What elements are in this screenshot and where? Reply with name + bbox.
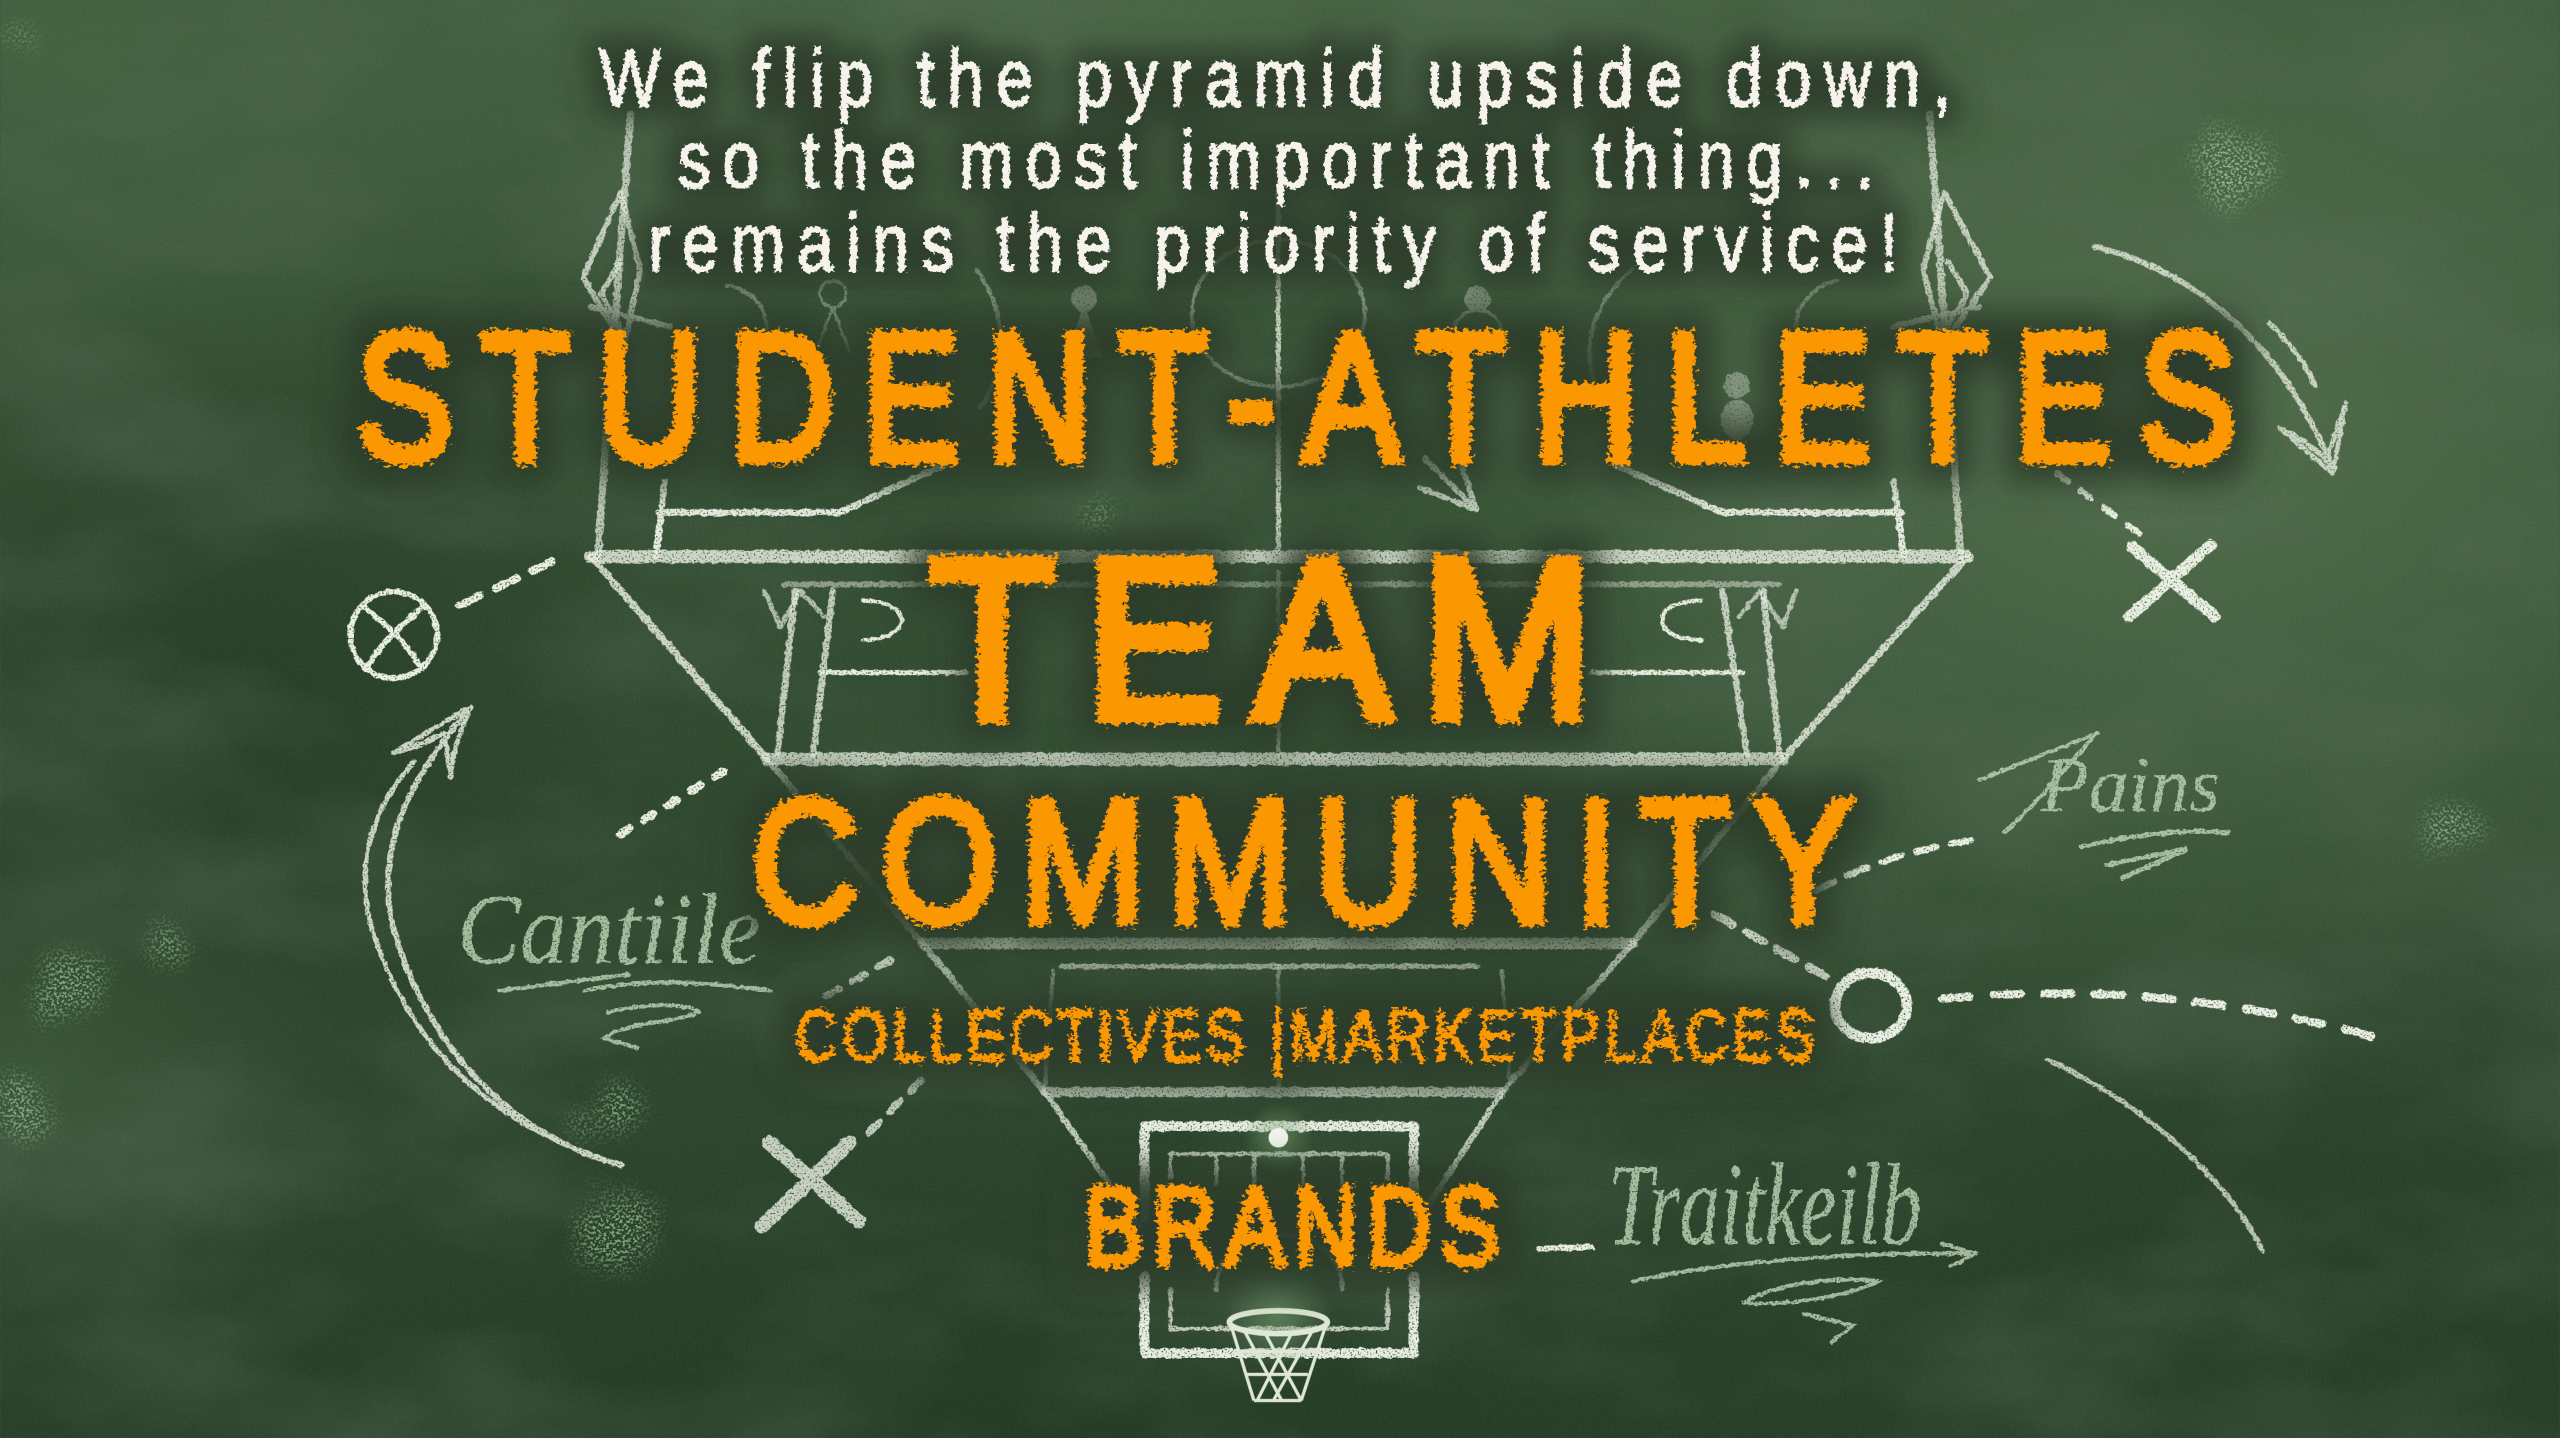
play markers and arrows bbox=[350, 246, 2378, 1250]
dashed line into right circle bbox=[1714, 914, 1825, 976]
right lower arc bbox=[2047, 1059, 2263, 1250]
right curved arrow bbox=[2094, 246, 2346, 473]
right backboard diamond bbox=[1894, 193, 1990, 346]
chalk signature: right bbox=[1979, 733, 2228, 878]
dashed line to bottom left X bbox=[826, 960, 924, 1133]
dotted line to second tier bbox=[621, 762, 738, 834]
third tier court bbox=[767, 759, 1783, 1090]
heading: collectives and marketplaces: COLLECTIVES |MARKETPLACES bbox=[795, 996, 1815, 1078]
icon: bottom left X marker bbox=[763, 1143, 859, 1226]
icon: left circled X player bbox=[350, 592, 437, 678]
dashed line leaving right circle bbox=[1943, 993, 2378, 1038]
line two: so the most important thing... bbox=[678, 114, 1874, 205]
line three: remains the priority of service! bbox=[648, 197, 1898, 289]
dashed line to top right X bbox=[2057, 473, 2142, 535]
chalk signature: bottom right bbox=[1608, 1140, 1975, 1342]
ghost player figures bbox=[816, 281, 1752, 437]
intro statement bbox=[599, 32, 1951, 289]
chalk signature: bottom right: Traitkeilb bbox=[1608, 1140, 1921, 1270]
heading: team: TEAM bbox=[929, 512, 1593, 768]
dashed curve to top right signature bbox=[1815, 841, 1970, 891]
chalk signature: left bbox=[457, 873, 771, 1048]
left backboard diamond bbox=[583, 193, 670, 346]
chalk signature: left: Cantiile bbox=[457, 873, 761, 985]
glowing dot at the bottom court bbox=[1242, 1102, 1314, 1174]
icon: top right X marker bbox=[2129, 545, 2215, 617]
top tier court bbox=[591, 114, 1967, 557]
inverted pyramid of basketball courts bbox=[583, 114, 1990, 1353]
heading: student-athletes: STUDENT-ATHLETES bbox=[356, 296, 2236, 500]
dashed line from left circle bbox=[459, 561, 552, 606]
heading: community: COMMUNITY bbox=[751, 763, 1853, 960]
fourth tier and bottom court bbox=[923, 943, 1633, 1353]
icon: right open circle player bbox=[1835, 973, 1907, 1038]
dash beside brands bbox=[1538, 1247, 1592, 1249]
icon: basketball hoop and net bbox=[1223, 1258, 1334, 1400]
heading: brands: BRANDS bbox=[1084, 1166, 1499, 1289]
chalk signature: right: Pains bbox=[2040, 741, 2220, 828]
second tier court bbox=[591, 557, 1967, 759]
left curved arrow bbox=[365, 707, 622, 1165]
pyramid tier labels bbox=[356, 296, 2236, 1289]
small center arrow bbox=[1420, 459, 1476, 509]
line one: We flip the pyramid upside down, bbox=[599, 32, 1951, 124]
